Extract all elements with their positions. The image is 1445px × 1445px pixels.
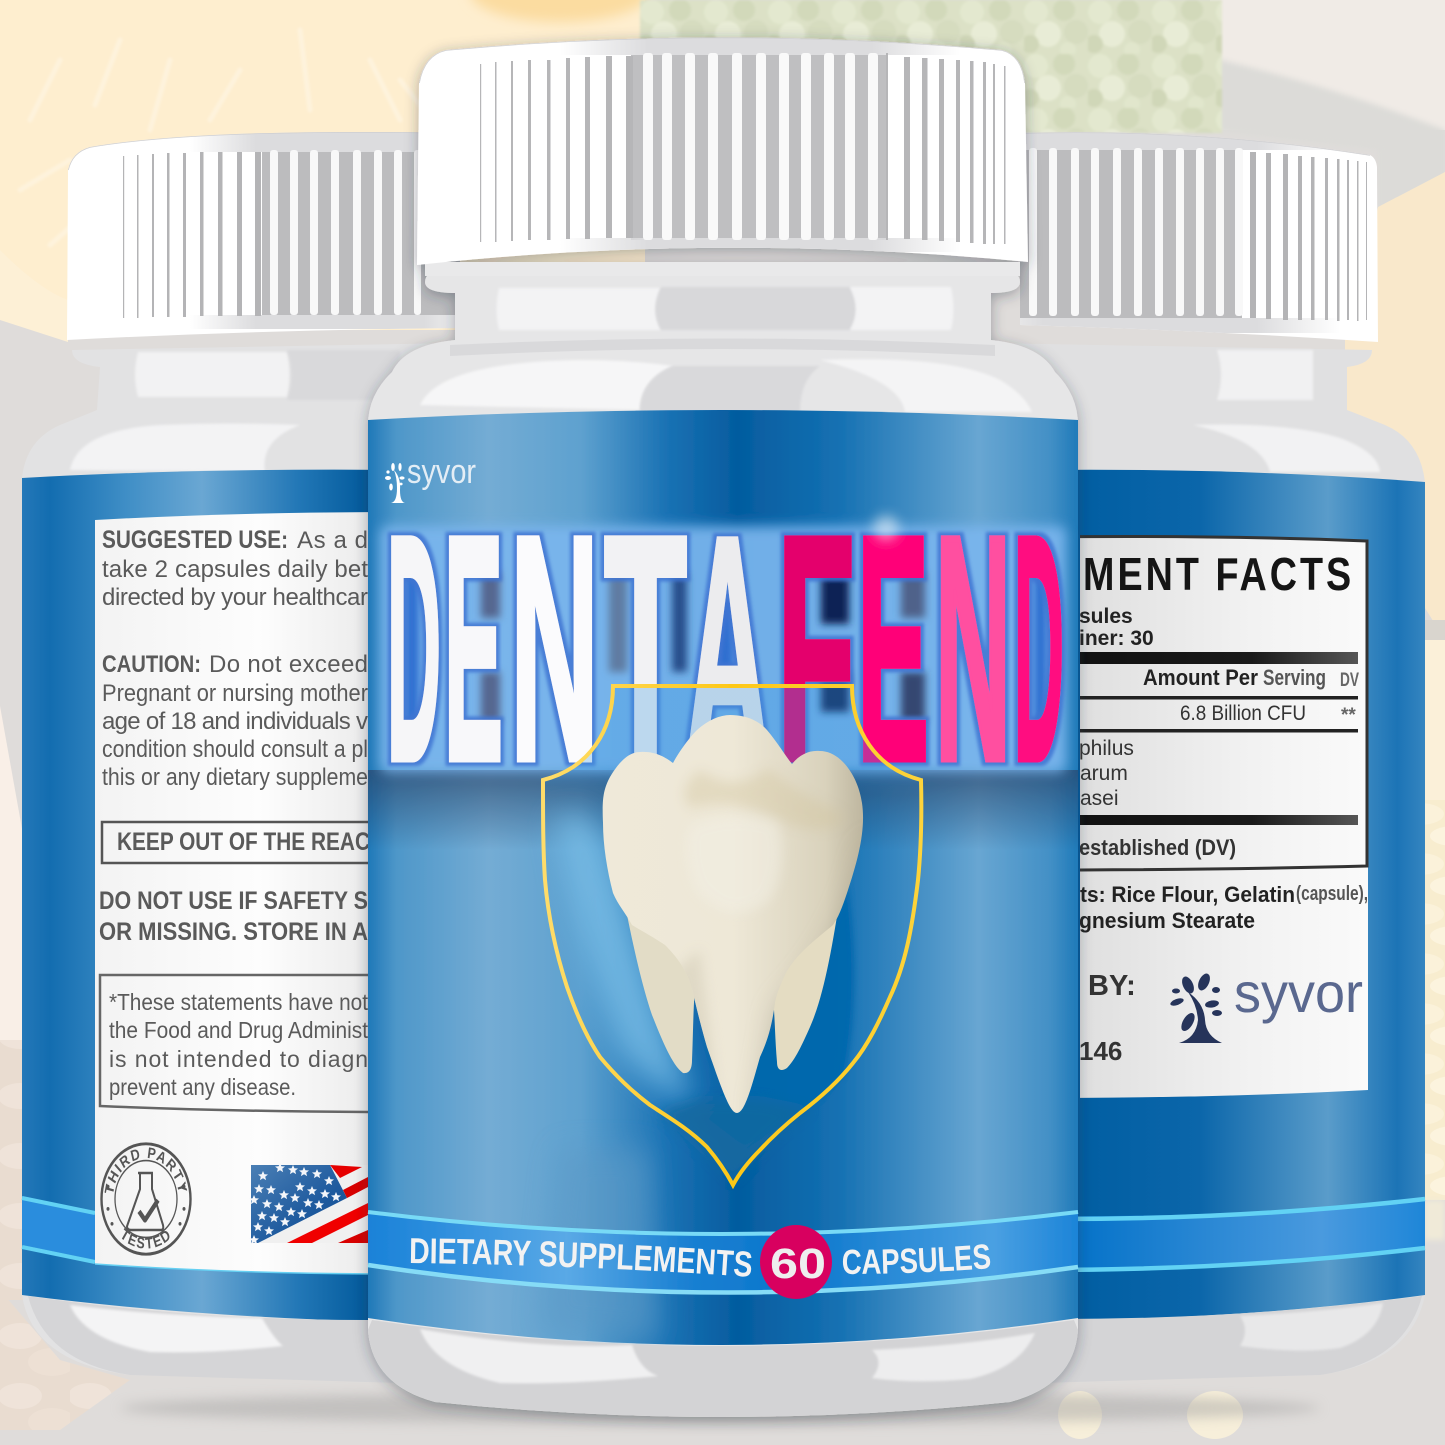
caution text: this or any dietary suppleme — [102, 764, 368, 791]
syvor logo: syvor — [1234, 961, 1363, 1024]
syvor logo — [1170, 974, 1362, 1043]
left bottle neck and body — [22, 343, 460, 1383]
right bottle: supplement facts — [1020, 132, 1426, 1382]
left edge wheat and nuts — [0, 706, 130, 1430]
panel title: MENT FACTS — [1083, 548, 1354, 600]
title: DENTAFEND: E — [857, 469, 929, 827]
tooth roots — [625, 900, 700, 1073]
icon: small tree — [385, 463, 405, 503]
title: DENTAFEND: F — [777, 469, 855, 827]
keep out box — [102, 822, 400, 863]
safety seal warning: OR MISSING. STORE IN A — [99, 918, 368, 946]
FDA disclaimer box: is not intended to diagn — [109, 1046, 368, 1072]
safety seal warning: DO NOT USE IF SAFETY S — [99, 887, 368, 915]
supplement facts panel box: established (DV) — [1079, 835, 1236, 860]
orange slice top left — [0, 0, 650, 342]
ingredient names: arum — [1080, 762, 1128, 785]
left stripe band — [22, 1196, 95, 1260]
right edge grains — [1058, 620, 1445, 1439]
keep out box: KEEP OUT OF THE REAC — [117, 828, 370, 856]
title: DENTAFEND: N — [935, 469, 1011, 827]
right bottle cap — [1020, 132, 1378, 342]
left bottle cap — [67, 132, 460, 340]
ingredient names — [1080, 740, 1134, 805]
title: DENTAFEND: E — [444, 469, 503, 827]
caution text: Do not exceed — [209, 651, 368, 678]
right bottle base shading — [1040, 1296, 1422, 1383]
suggested use text: As a d — [297, 527, 368, 554]
suggested use text: SUGGESTED USE: — [102, 526, 288, 554]
left white label with text — [95, 512, 368, 1275]
supplement band — [368, 1210, 1078, 1299]
title: DENTAFEND: A — [685, 469, 770, 827]
band text: DIETARY SUPPLEMENTS — [410, 1238, 752, 1277]
broccoli top center — [640, 0, 1222, 133]
caution text: condition should consult a pl — [102, 736, 368, 763]
supplement facts panel box: Amount Per — [1143, 665, 1258, 690]
bottom base shading — [368, 1320, 1078, 1417]
right white label with text — [1080, 535, 1368, 1098]
third party tested badge: TESTED — [122, 1228, 170, 1248]
caution text: Pregnant or nursing mother — [102, 680, 368, 707]
left bottle: back label with directions — [22, 132, 460, 1382]
FDA disclaimer box: the Food and Drug Administ — [109, 1017, 369, 1043]
icon: tooth — [602, 715, 864, 1113]
caution text: age of 18 and individuals v — [102, 708, 368, 735]
logo: syvor — [385, 453, 476, 503]
center bottle neck and body — [368, 262, 1078, 1417]
shield — [543, 686, 921, 1185]
distributed by text — [1080, 975, 1133, 1060]
ingredient names: philus — [1079, 737, 1134, 760]
suggested use text: take 2 capsules daily bet — [102, 556, 368, 583]
center blue label — [368, 410, 1078, 1345]
lower label tone — [540, 1150, 660, 1340]
other ingredients text: gnesium Stearate — [1079, 908, 1255, 933]
american flag — [249, 1163, 368, 1244]
center bottle: front label — [359, 32, 1087, 1429]
suggested use text — [102, 526, 368, 611]
left bottle base shading — [28, 1296, 400, 1383]
capsule count badge: 60 — [770, 1240, 826, 1288]
supplement facts panel box: DV — [1340, 670, 1359, 691]
shield inner tones — [555, 815, 690, 1100]
right stripe band — [1040, 1198, 1425, 1268]
FDA disclaimer box: prevent any disease. — [109, 1074, 296, 1100]
capsule count badge — [760, 1225, 832, 1299]
other ingredients text: ts: Rice Flour, Gelatin — [1080, 882, 1295, 907]
left bottle blue label — [22, 470, 400, 1322]
right bottle neck and body — [990, 343, 1425, 1383]
distributed by text: BY: — [1088, 970, 1136, 1002]
supplement facts panel box: Serving — [1263, 665, 1326, 690]
title: DENTAFEND: T — [604, 469, 687, 827]
ingredient names: asei — [1080, 787, 1119, 810]
shadows under bottles — [120, 1392, 1320, 1424]
supplement facts panel box: 6.8 Billion CFU — [1180, 702, 1306, 725]
FDA disclaimer box: *These statements have not — [109, 989, 369, 1015]
sparkle on letter E — [873, 515, 899, 541]
third party tested badge: THIRD PARTY — [104, 1147, 188, 1193]
band text right: CAPSULES — [842, 1244, 990, 1274]
text: D — [1014, 469, 1064, 827]
right bottle blue label — [1040, 470, 1425, 1320]
caution text — [102, 651, 368, 791]
other ingredients text: (capsule), — [1296, 883, 1368, 905]
caution text: CAUTION: — [102, 651, 201, 678]
supplement facts panel box: ** — [1341, 705, 1356, 726]
title glow — [380, 526, 1066, 772]
title: DENTAFEND: D — [387, 469, 441, 827]
darkening below title — [368, 770, 1078, 850]
distributed by text: 146 — [1079, 1036, 1122, 1066]
tooth crown and central root — [595, 710, 880, 1120]
other ingredients text — [1079, 882, 1368, 933]
icon: tree — [1169, 972, 1222, 1043]
serving info: sules — [1079, 605, 1133, 628]
title: DENTAFEND — [387, 469, 1064, 827]
FDA disclaimer box — [100, 975, 400, 1112]
suggested use text: directed by your healthcar — [102, 584, 368, 611]
counter shadows inside title letters — [405, 562, 1047, 736]
safety seal warning — [100, 891, 368, 940]
icon: flask with check — [127, 1173, 163, 1230]
serving info: iner: 30 — [1079, 627, 1154, 650]
serving info — [1080, 608, 1153, 645]
title: DENTAFEND: N — [510, 469, 599, 827]
third party tested badge — [100, 1142, 192, 1256]
plate and orange wedge top right — [1200, 0, 1445, 640]
supplement facts panel box — [1080, 535, 1368, 872]
logo: syvor: syvor — [407, 453, 476, 491]
center bottle cap — [410, 25, 1035, 275]
